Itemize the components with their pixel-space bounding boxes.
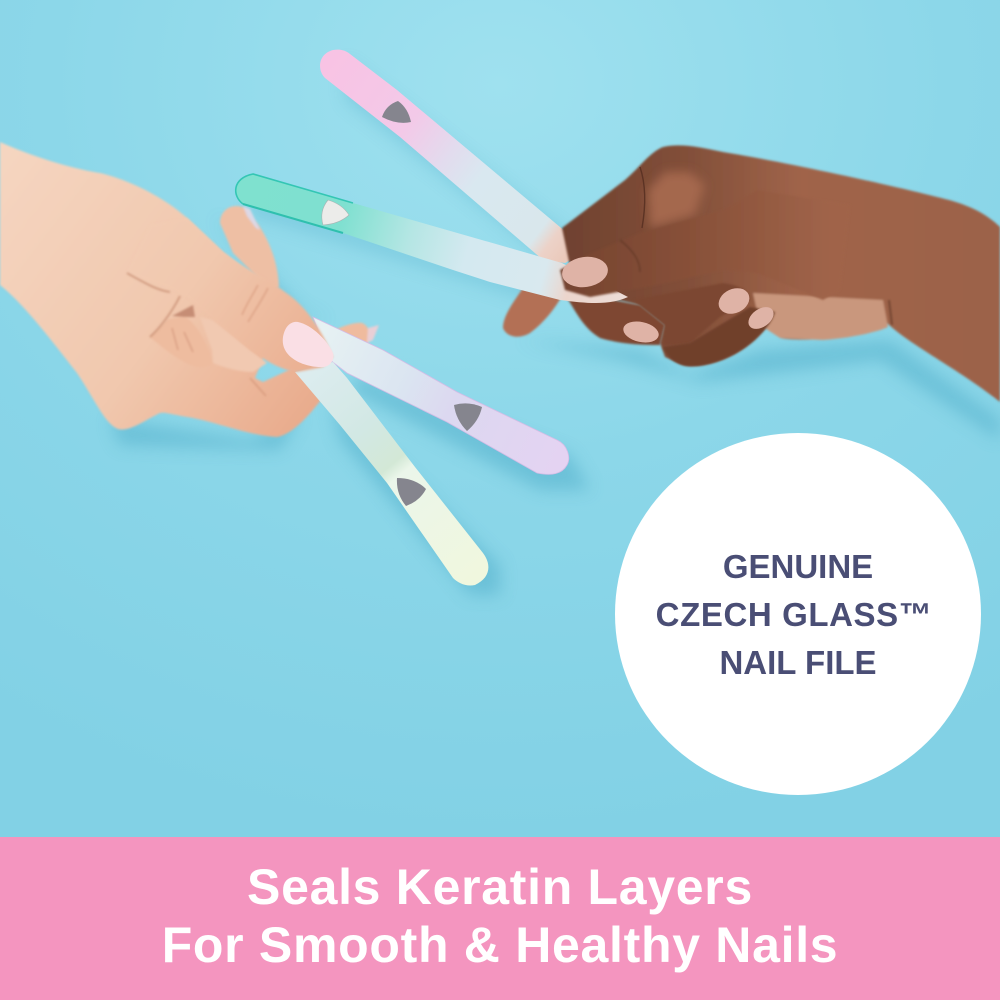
badge on teal file [322, 200, 349, 225]
shadows [110, 60, 1000, 595]
right hand: small finger on the left [503, 285, 565, 337]
right hand: knuckle creases [640, 167, 645, 228]
left hand: pink nail [283, 322, 333, 367]
banner text: Seals Keratin Layers [247, 859, 753, 915]
banner text: For Smooth & Healthy Nails [162, 917, 838, 973]
right hand: thumb [560, 190, 850, 300]
badge text [656, 548, 932, 681]
right hand: knuckle highlight [648, 172, 705, 228]
nail file: cream [295, 362, 488, 586]
left hand: palm and thumb [0, 142, 325, 437]
badge on pink file [382, 101, 411, 123]
banner: pink [0, 837, 1000, 1000]
right hand: wrist, palm and fingers [562, 145, 1000, 402]
left hand: curled fingers [150, 305, 267, 396]
right hand: lower finger [560, 290, 665, 345]
right hand: middle curled finger [633, 283, 750, 345]
badge: white circle [615, 433, 981, 795]
badge on lilac file [454, 403, 482, 431]
nail file: teal [236, 174, 628, 303]
left hand: index finger [127, 218, 333, 372]
right hand: ring curled finger [663, 307, 775, 366]
left hand: back finger [220, 206, 379, 350]
right hand: nails [560, 254, 778, 346]
badge text: CZECH GLASS™ [656, 596, 932, 633]
badge on cream file [397, 478, 426, 506]
banner text [162, 859, 838, 973]
badge text: GENUINE [723, 548, 873, 585]
badge text: NAIL FILE [719, 644, 877, 681]
nail file: lilac [313, 317, 569, 474]
nail file: pink [320, 50, 587, 263]
